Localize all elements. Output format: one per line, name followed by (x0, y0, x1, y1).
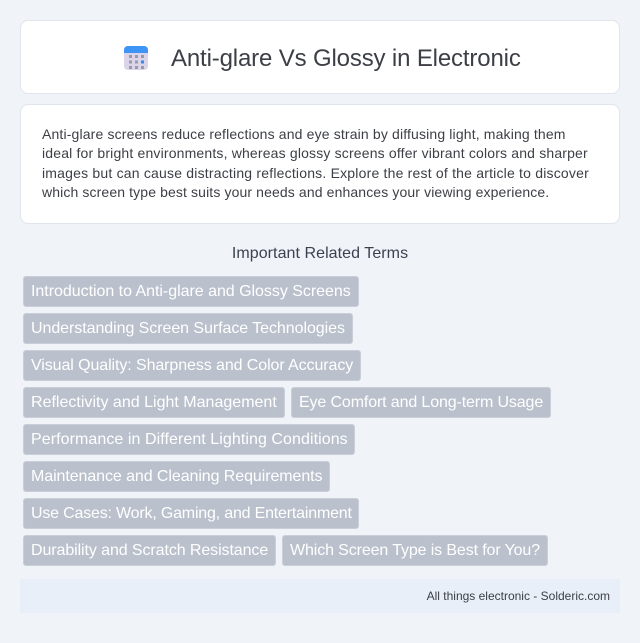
tag: Eye Comfort and Long-term Usage (299, 394, 543, 411)
tag (23, 424, 355, 455)
intro text: images but can cause distracting reflections. Explore the rest of the article to discover (42, 165, 589, 181)
heading: related terms: Important Related Terms (232, 245, 408, 262)
tag: Introduction to Anti-glare and Glossy Screens (31, 283, 351, 300)
intro text (42, 126, 589, 200)
tag (23, 461, 330, 492)
tag: Use Cases: Work, Gaming, and Entertainment (31, 505, 352, 522)
footer: All things electronic - Solderic.com (427, 589, 610, 603)
intro text card (20, 104, 620, 224)
tag: Which Screen Type is Best for You? (290, 542, 540, 559)
tag (23, 498, 359, 529)
title: Anti-glare Vs Glossy in Electronic (171, 45, 521, 72)
intro text: ideal for bright environments, whereas glossy screens offer vibrant colors and sharper (42, 145, 588, 161)
tag (282, 535, 548, 566)
tag: Maintenance and Cleaning Requirements (31, 468, 322, 485)
title card (20, 20, 620, 94)
tag (23, 313, 353, 344)
tag (23, 535, 276, 566)
tag (23, 387, 285, 418)
tag (291, 387, 551, 418)
tag: Performance in Different Lighting Conditions (31, 431, 348, 448)
tag: Durability and Scratch Resistance (31, 542, 268, 559)
tag: Understanding Screen Surface Technologies (31, 320, 345, 337)
tag (23, 276, 359, 307)
intro text: Anti-glare screens reduce reflections and eye strain by diffusing light, making them (42, 126, 566, 142)
tag: Reflectivity and Light Management (31, 394, 277, 411)
tag (23, 350, 361, 381)
footer (20, 579, 620, 613)
intro text: which screen type best suits your needs and enhances your viewing experience. (42, 184, 549, 200)
icon: calendar (124, 46, 148, 70)
tag: Visual Quality: Sharpness and Color Accuracy (31, 357, 353, 374)
related terms tags (23, 276, 551, 566)
